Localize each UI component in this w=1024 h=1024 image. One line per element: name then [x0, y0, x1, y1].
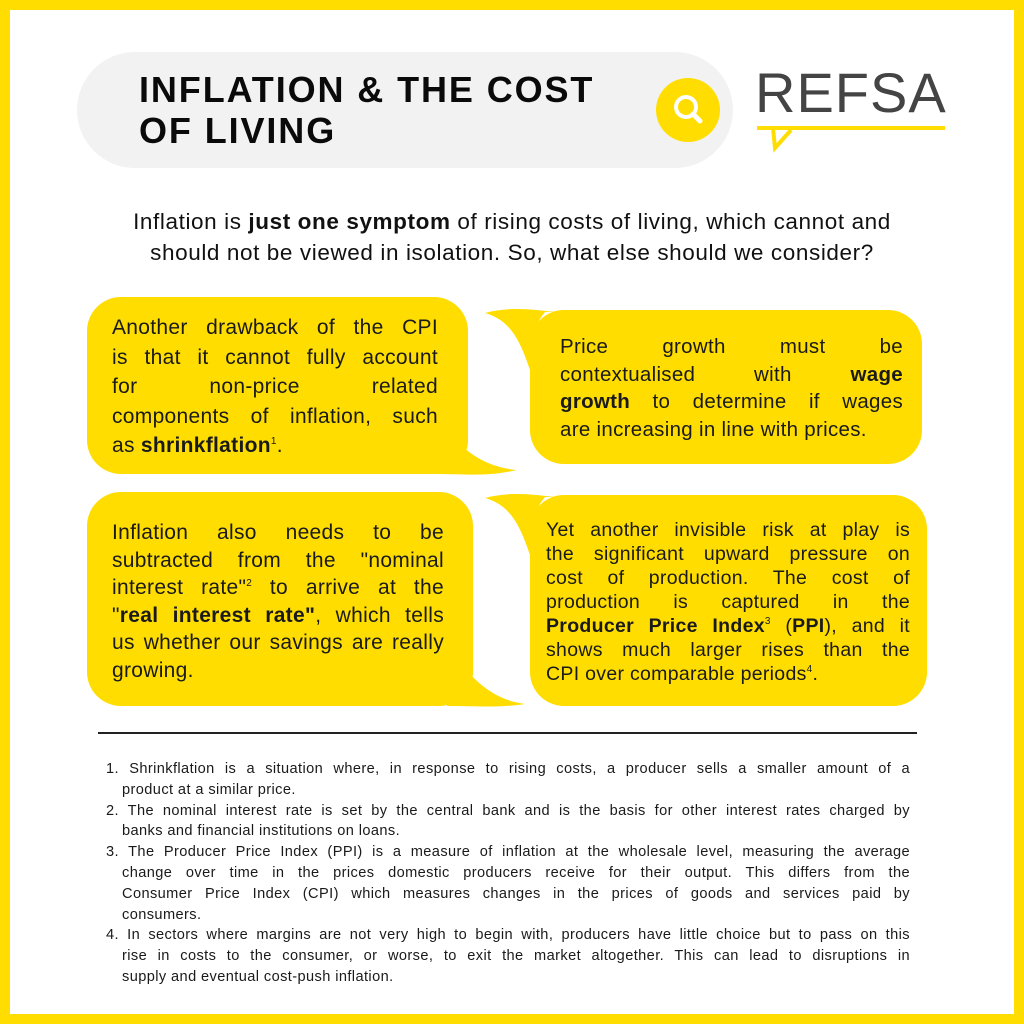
panel: producer price index: Producer Price Index3 (PPI), and it	[546, 615, 910, 637]
panel: producer price index	[530, 495, 927, 706]
panel: producer price index: Yet another invisible risk at play is	[546, 519, 910, 541]
panel: CPI drawback: as shrinkflation1.	[112, 434, 283, 457]
panel: CPI drawback: is that it cannot fully account	[112, 346, 438, 368]
panel: CPI drawback	[87, 297, 468, 474]
footnotes: rise in costs to the consumer, or worse, to exit the market altogether. This can lead to disruptions in	[122, 948, 910, 964]
panel: wage growth	[530, 310, 922, 464]
panel: real interest rate: us whether our savings are really	[112, 631, 444, 654]
footnotes: 4. In sectors where margins are not very high to begin with, producers have little choice but to pass on this	[106, 927, 910, 943]
footnotes: 2. The nominal interest rate is set by the central bank and is the basis for other interest rates charged by	[106, 803, 910, 819]
footnotes	[106, 761, 910, 985]
title: OF LIVING	[139, 110, 336, 151]
footnotes: banks and financial institutions on loans.	[122, 823, 400, 839]
panel: producer price index: the significant upward pressure on	[546, 543, 910, 565]
panel: CPI drawback: Another drawback of the CPI	[112, 316, 438, 339]
panel: producer price index: production is captured in the	[546, 591, 910, 613]
panel: producer price index: shows much larger rises than the	[546, 639, 910, 661]
panel: wage growth: contextualised with wage	[560, 362, 903, 386]
panel: wage growth: Price growth must be	[560, 335, 903, 358]
footnotes: product at a similar price.	[122, 782, 296, 798]
intro text: Inflation is just one symptom of rising costs of living, which cannot and	[133, 209, 891, 234]
footnotes: supply and eventual cost-push inflation.	[122, 969, 394, 985]
intro text	[133, 209, 891, 265]
footnotes: 1. Shrinkflation is a situation where, in response to rising costs, a producer sells a smaller amount of a	[106, 761, 910, 777]
panel: wage growth: growth to determine if wages	[560, 390, 903, 413]
header pill	[77, 52, 733, 168]
title	[139, 69, 594, 151]
panel: real interest rate	[87, 492, 473, 706]
footnotes: Consumer Price Index (CPI) which measures changes in the prices of goods and services paid by	[122, 886, 910, 902]
panel: real interest rate: "real interest rate", which tells	[112, 604, 444, 627]
footnotes: consumers.	[122, 907, 201, 923]
intro text: should not be viewed in isolation. So, what else should we consider?	[150, 240, 874, 265]
panel: real interest rate: growing.	[112, 659, 194, 682]
icon: search magnifier	[656, 78, 720, 142]
panel: wage growth: are increasing in line with prices.	[560, 418, 867, 440]
panel: CPI drawback: components of inflation, such	[112, 404, 438, 428]
logo: REFSA	[755, 61, 947, 153]
panel: producer price index: CPI over comparable periods4.	[546, 663, 818, 685]
panel: producer price index: cost of production. The cost of	[546, 567, 910, 589]
panel: real interest rate: interest rate"2 to arrive at the	[112, 576, 444, 599]
logo: REFSA: REFSA	[755, 61, 947, 124]
footnotes: change over time in the prices domestic producers receive for their output. This differs from the	[122, 865, 910, 881]
panel: real interest rate: Inflation also needs to be	[112, 521, 444, 544]
footnotes: 3. The Producer Price Index (PPI) is a measure of inflation at the wholesale level, measuring the average	[106, 844, 910, 860]
panel: CPI drawback: for non-price related	[112, 375, 438, 398]
title: INFLATION & THE COST	[139, 69, 594, 110]
panel: real interest rate: subtracted from the "nominal	[112, 549, 444, 572]
